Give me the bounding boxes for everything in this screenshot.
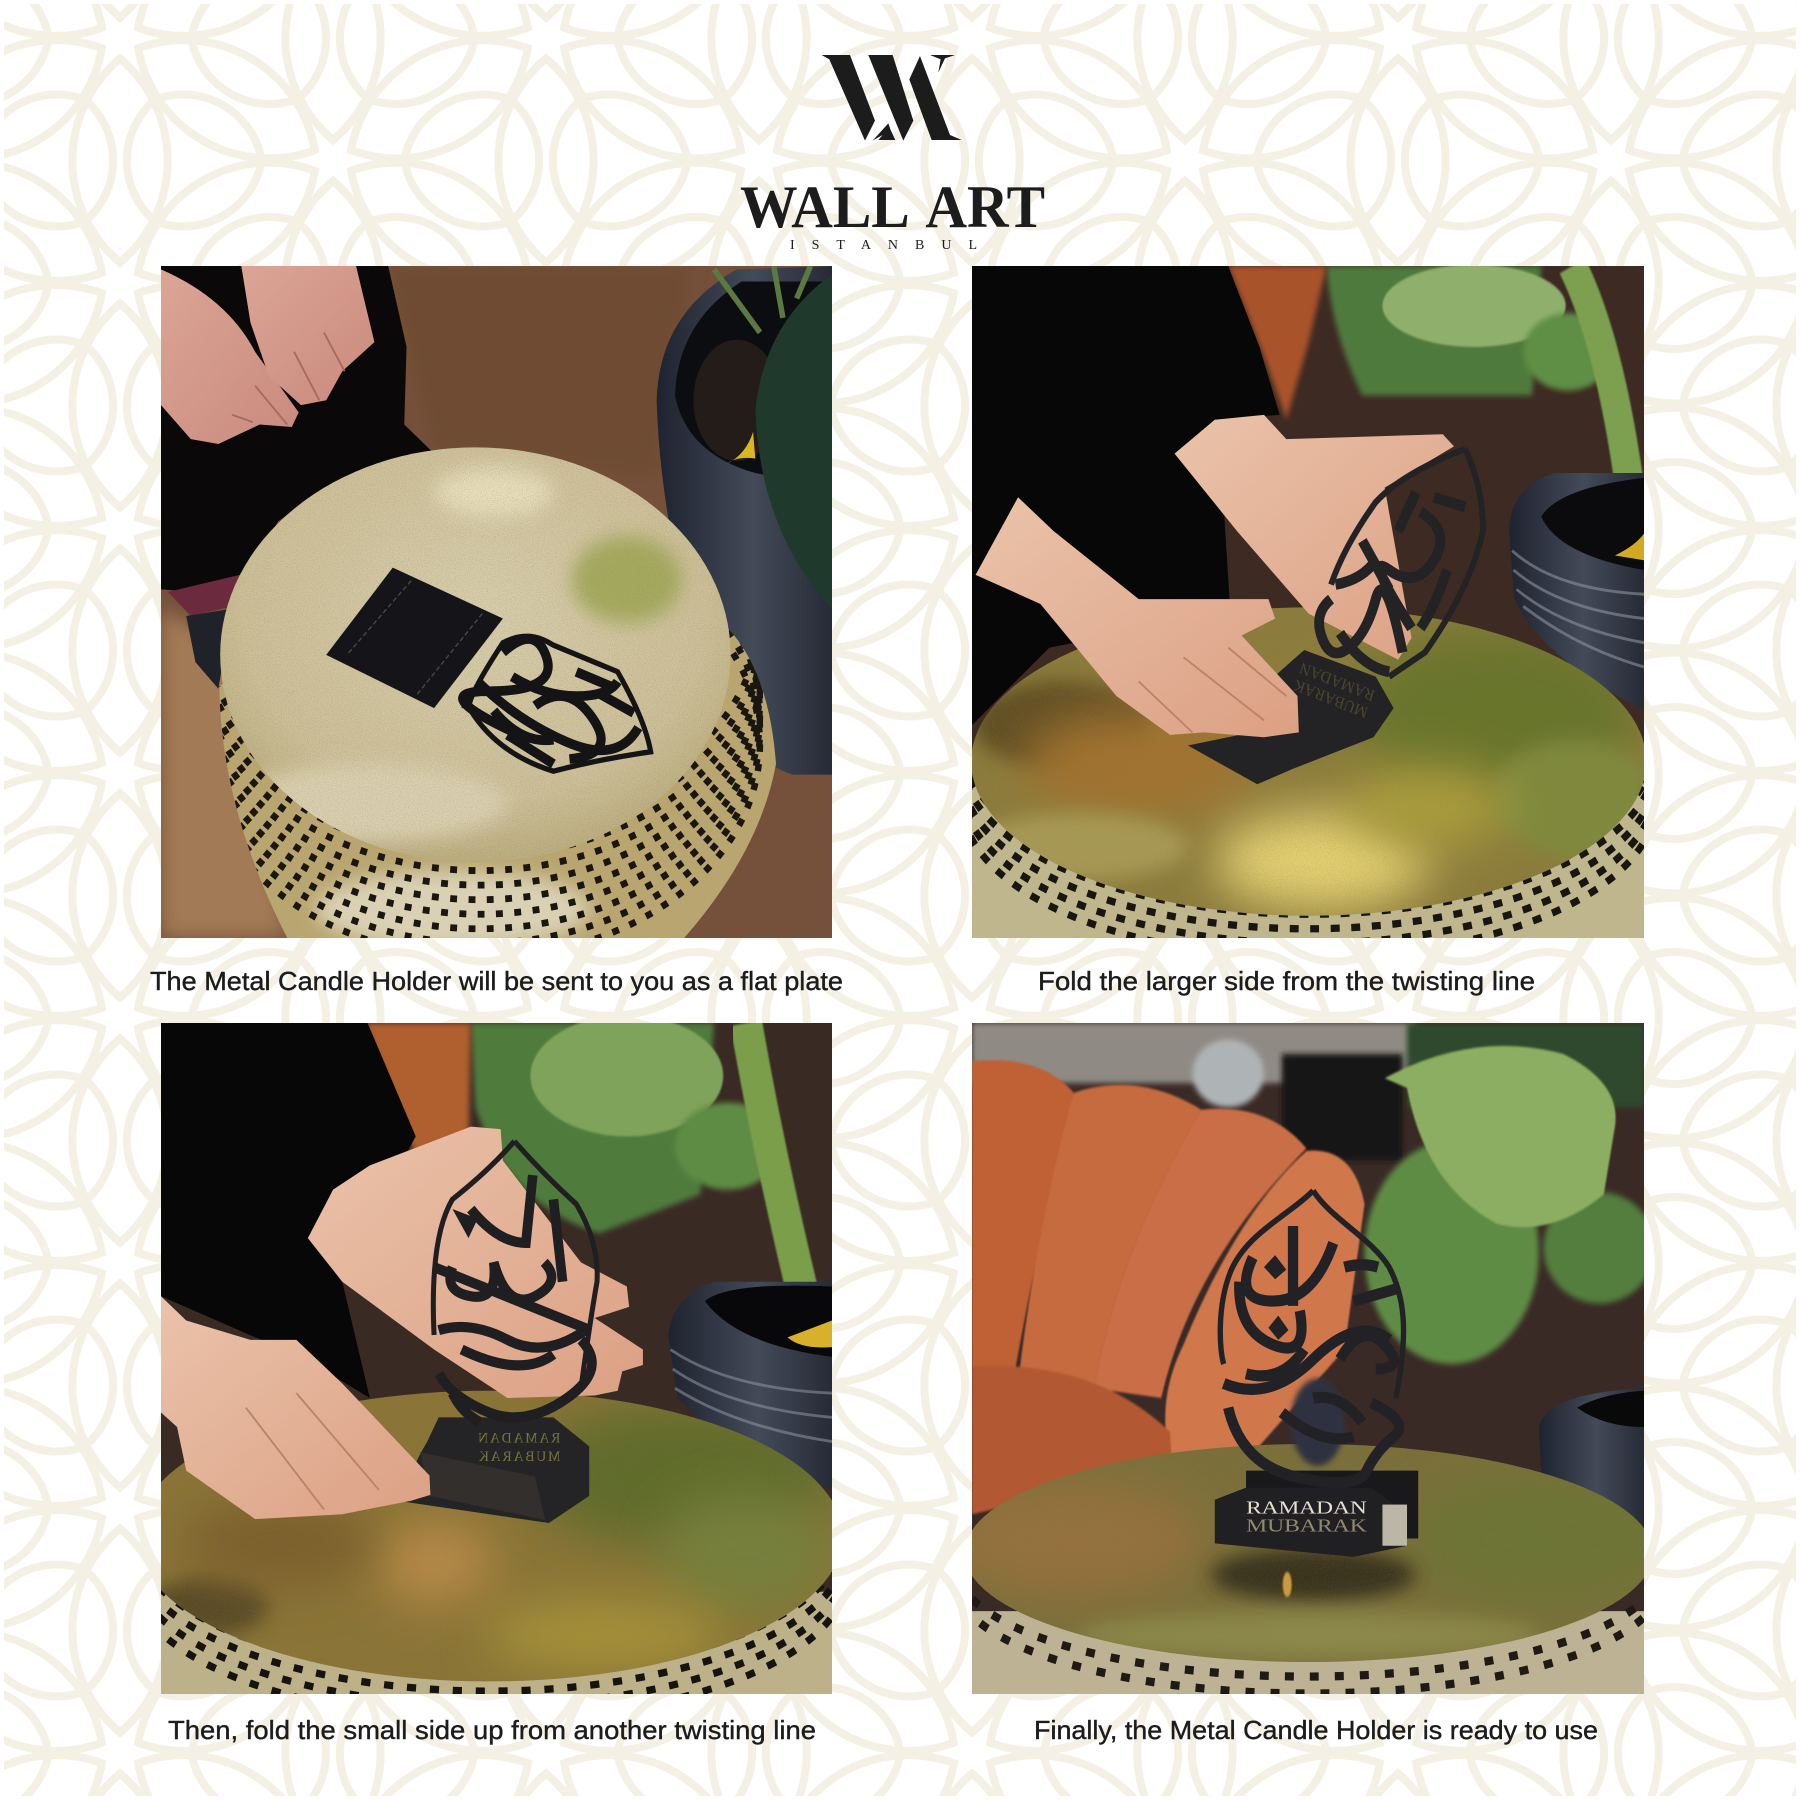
person: black trousers, sock and boot [161, 266, 432, 689]
pot [1539, 1388, 1644, 1524]
caption: step 2: Fold the larger side from the twisting line [1038, 966, 1535, 996]
holder plate and calligraphy: RAMADAN [1297, 658, 1377, 704]
holder with calligraphy and folded tab: MUBARAK [477, 1449, 560, 1465]
finished candle holder with calligraphy [1215, 1191, 1418, 1557]
holding hand [308, 1127, 643, 1398]
folding hand [161, 1296, 430, 1519]
plant leaves and stalks [471, 1015, 824, 1325]
logo: Wall Art Istanbul [740, 55, 1045, 253]
hands [161, 266, 374, 444]
pot [1509, 473, 1644, 711]
icon: WM monogram [822, 55, 962, 141]
blurred room background [972, 1023, 1644, 1694]
holder with calligraphy and folded tab [397, 1141, 597, 1523]
holder plate and calligraphy: MUBARAK [1291, 675, 1370, 721]
gold stool top [218, 446, 732, 863]
plant leaves and stalk [1327, 265, 1637, 551]
caption: step 1: The Metal Candle Holder will be sent to you as a flat plate [150, 966, 843, 996]
wooden floor [161, 266, 832, 938]
panel: step 1 photo, flat plate on gold stool [161, 266, 832, 938]
caption: step 4: Finally, the Metal Candle Holder is ready to use [1034, 1715, 1598, 1745]
pot [668, 1282, 832, 1490]
holder with calligraphy and folded tab: RAMADAN [476, 1430, 560, 1447]
holding hand [1175, 415, 1454, 660]
plant leaf [714, 266, 832, 609]
gold table top [972, 1444, 1644, 1662]
plant leaves [1365, 1023, 1655, 1364]
brand subtitle: ISTANBUL [790, 238, 977, 253]
pot [657, 266, 832, 775]
candle glow reflection [1283, 1572, 1292, 1597]
woven table rim [972, 777, 1644, 938]
gold table top [136, 1388, 843, 1684]
panel: step 2 photo, folding larger side [972, 266, 1644, 938]
black sleeve [972, 266, 1280, 725]
caption: step 3: Then, fold the small side up from another twisting line [168, 1715, 816, 1745]
orange sofa [1228, 266, 1327, 420]
brick wall [161, 1023, 832, 1694]
panel: step 3 photo, folding small side [161, 1023, 832, 1694]
black sleeve [161, 1023, 416, 1398]
brand name: WALL ART [740, 174, 1045, 240]
finished candle holder with calligraphy: RAMADAN [1246, 1498, 1367, 1517]
gold table top [971, 606, 1653, 917]
woven table rim [161, 1572, 832, 1694]
holder plate with calligraphy, flat [326, 568, 651, 771]
brick wall [972, 266, 1644, 938]
flat hand [976, 497, 1299, 737]
woven table rim [955, 1454, 1662, 1694]
woven stool body [219, 629, 776, 938]
holder plate and calligraphy [1188, 449, 1483, 784]
orange sofa [972, 1060, 1365, 1514]
panel: step 4 photo, finished candle holder [972, 1023, 1644, 1694]
orange sofa [365, 1023, 471, 1156]
finished candle holder with calligraphy: MUBARAK [1246, 1516, 1367, 1536]
